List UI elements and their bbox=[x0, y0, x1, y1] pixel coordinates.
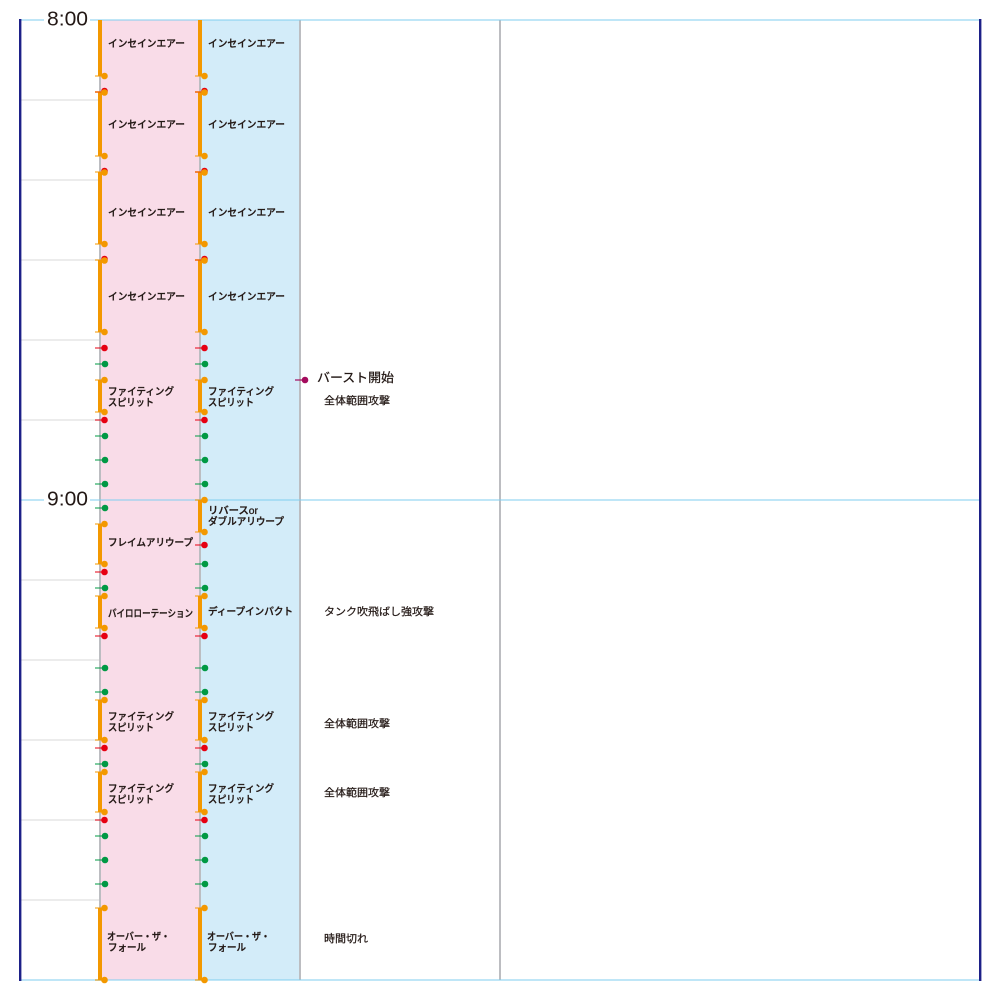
notes column: 全体範囲攻撃 bbox=[324, 786, 391, 799]
lane 2 labels: スピリット bbox=[208, 397, 254, 409]
lane 1 labels: ファイティング bbox=[108, 782, 174, 795]
lane 1 labels: インセインエアー bbox=[108, 291, 185, 303]
notes column bbox=[324, 394, 435, 945]
lane 2 cast bars bbox=[198, 20, 202, 980]
lane 1 cast bars bbox=[98, 20, 102, 980]
burst start heading: バースト開始 bbox=[317, 371, 395, 385]
lane 1 labels: ファイティング bbox=[108, 385, 174, 398]
lane 1 labels: パイロローテーション bbox=[108, 608, 193, 620]
burst start marker bbox=[295, 377, 308, 383]
lane 2 labels: ダブルアリウープ bbox=[208, 515, 284, 528]
lane 1 labels: フォール bbox=[108, 942, 146, 954]
notes column: 全体範囲攻撃 bbox=[324, 394, 391, 407]
lane 1 labels: インセインエアー bbox=[108, 119, 185, 131]
panel: pink lane bbox=[100, 20, 200, 980]
lane 2 labels: ファイティング bbox=[208, 710, 274, 723]
time label 9:00: 9:00 bbox=[47, 488, 88, 510]
lane 2 labels bbox=[207, 38, 293, 954]
right navy border bbox=[979, 19, 981, 981]
notes column: タンク吹飛ばし強攻撃 bbox=[324, 605, 435, 618]
left navy border bbox=[19, 19, 21, 981]
panel: blue lane bbox=[200, 20, 300, 980]
lane 1 red markers bbox=[95, 88, 108, 823]
lane 2 labels: インセインエアー bbox=[208, 38, 285, 50]
grid lines bbox=[21, 100, 99, 900]
lane 1 orange markers bbox=[95, 73, 108, 983]
lane 2 labels: インセインエアー bbox=[208, 119, 285, 131]
notes column: 全体範囲攻撃 bbox=[324, 717, 391, 730]
lane 2 labels: フォール bbox=[208, 942, 246, 954]
lane 1 green markers bbox=[95, 361, 108, 887]
lane 2 labels: ディープインパクト bbox=[208, 605, 293, 618]
lane 1 labels: ファイティング bbox=[108, 710, 174, 723]
lane 1 labels: スピリット bbox=[108, 794, 154, 806]
lane 1 labels bbox=[107, 38, 193, 954]
lane 2 green markers bbox=[195, 361, 208, 887]
lane 2 orange markers bbox=[195, 73, 208, 983]
lane 2 labels: ファイティング bbox=[208, 782, 274, 795]
lane 2 red markers bbox=[195, 88, 208, 823]
lane 1 labels: オーバー・ザ・ bbox=[107, 931, 170, 943]
lane 2 labels: ファイティング bbox=[208, 385, 274, 398]
lane 1 labels: フレイムアリウープ bbox=[108, 537, 193, 549]
lane 2 labels: オーバー・ザ・ bbox=[207, 931, 270, 943]
lane 2 labels: インセインエアー bbox=[208, 291, 285, 303]
lane 1 labels: インセインエアー bbox=[108, 38, 185, 50]
lane 1 labels: スピリット bbox=[108, 397, 154, 409]
notes column: 時間切れ bbox=[324, 933, 369, 945]
lane 1 labels: スピリット bbox=[108, 722, 154, 734]
lane 2 labels: スピリット bbox=[208, 722, 254, 734]
time label 8:00: 8:00 bbox=[47, 8, 88, 30]
lane 2 labels: リバースor bbox=[208, 505, 259, 517]
lane 2 labels: スピリット bbox=[208, 794, 254, 806]
lane 1 labels: インセインエアー bbox=[108, 207, 185, 219]
lane 2 labels: インセインエアー bbox=[208, 207, 285, 219]
